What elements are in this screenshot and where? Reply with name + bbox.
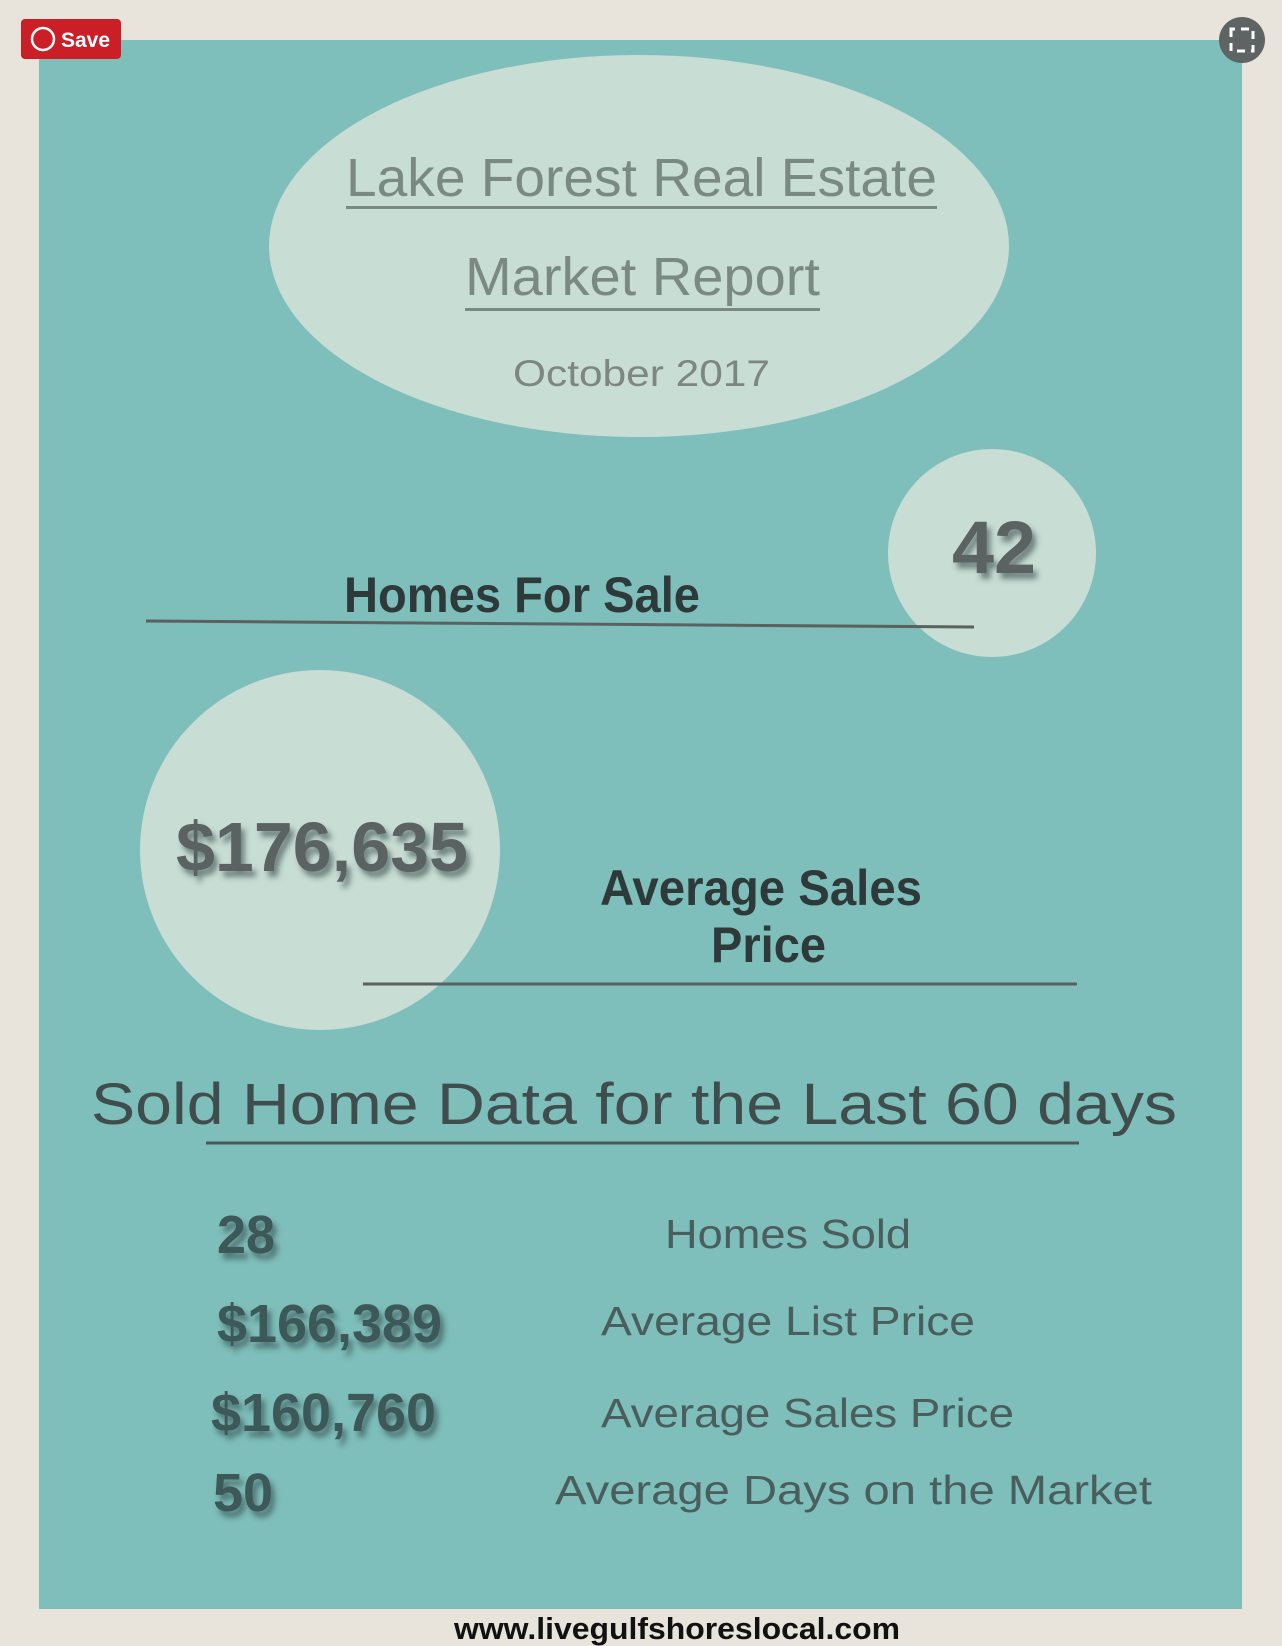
- stats: Average Days on the Market: [555, 1467, 1153, 1513]
- stats: 50: [213, 1463, 273, 1523]
- save button: [21, 19, 121, 59]
- average sales price: Price: [711, 917, 826, 973]
- homes for sale: 42: [952, 506, 1036, 589]
- date: October 2017: [513, 353, 770, 394]
- average sales price: Average Sales: [600, 860, 922, 916]
- sold heading: Sold Home Data for the Last 60 days: [91, 1072, 1177, 1137]
- stats: [211, 1205, 1153, 1523]
- title: Market Report: [465, 247, 820, 307]
- stats: $166,389: [217, 1294, 442, 1354]
- stats: $160,760: [211, 1383, 436, 1443]
- icon: expand: [1219, 17, 1265, 63]
- average sales price: [140, 670, 1077, 1030]
- stats: Average Sales Price: [601, 1390, 1014, 1436]
- homes for sale: Homes For Sale: [344, 567, 700, 623]
- homes for sale: [146, 449, 1096, 657]
- save button: Save: [61, 29, 110, 52]
- title ellipse: [269, 55, 1009, 437]
- title: Lake Forest Real Estate: [346, 148, 937, 208]
- stats: Homes Sold: [665, 1211, 911, 1257]
- stats: 28: [217, 1205, 275, 1265]
- stats: Average List Price: [601, 1298, 975, 1344]
- title: [346, 148, 937, 311]
- average sales price: $176,635: [176, 808, 468, 886]
- footer url: www.livegulfshoreslocal.com: [453, 1611, 900, 1646]
